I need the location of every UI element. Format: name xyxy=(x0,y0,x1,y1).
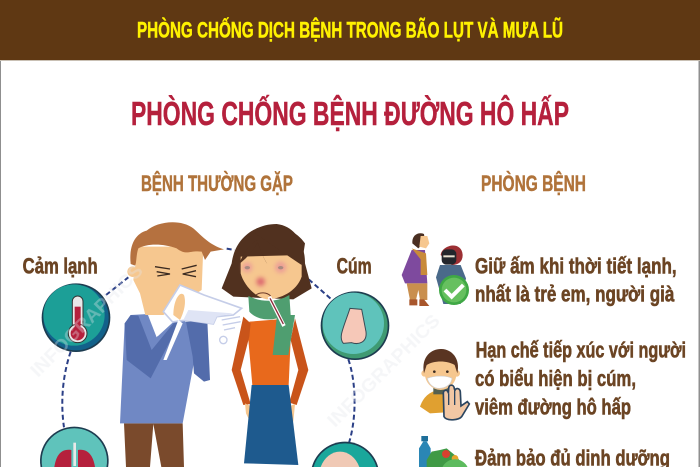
watermarks: INFOGRAPHICS xyxy=(27,261,147,381)
dashed connector ring xyxy=(62,249,331,427)
icon: thermometer circle xyxy=(42,283,110,352)
watermarks xyxy=(27,261,444,431)
icon: warm clothing people xyxy=(402,233,469,306)
icon: nose circle xyxy=(321,291,389,360)
icon: masked boy with stop hand xyxy=(420,349,469,420)
label: common cold: Cảm lạnh xyxy=(23,253,98,278)
icon: throat circle xyxy=(312,442,378,467)
icon: lungs circle xyxy=(40,427,109,467)
icon: water bottle and vegetables xyxy=(419,436,467,467)
heading: prevention: PHÒNG BỆNH xyxy=(481,171,586,196)
dashed connector: nose to throat xyxy=(348,359,355,445)
heading: common diseases: BỆNH THƯỜNG GẶP xyxy=(141,171,293,196)
label: flu: Cúm xyxy=(337,253,372,278)
person: woman with scarf and thermometer xyxy=(222,224,312,465)
text: limit contact xyxy=(475,338,686,420)
text: keep warm xyxy=(475,253,677,307)
header banner xyxy=(0,0,700,61)
panel: prevention list xyxy=(402,233,686,467)
text: limit contact: viêm đường hô hấp xyxy=(475,395,631,420)
watermarks: INFOGRAPHICS xyxy=(324,311,444,431)
person: man sneezing xyxy=(120,222,242,467)
text: limit contact: có biểu hiện bị cúm, xyxy=(475,366,636,391)
panel: common diseases illustration xyxy=(23,222,389,467)
